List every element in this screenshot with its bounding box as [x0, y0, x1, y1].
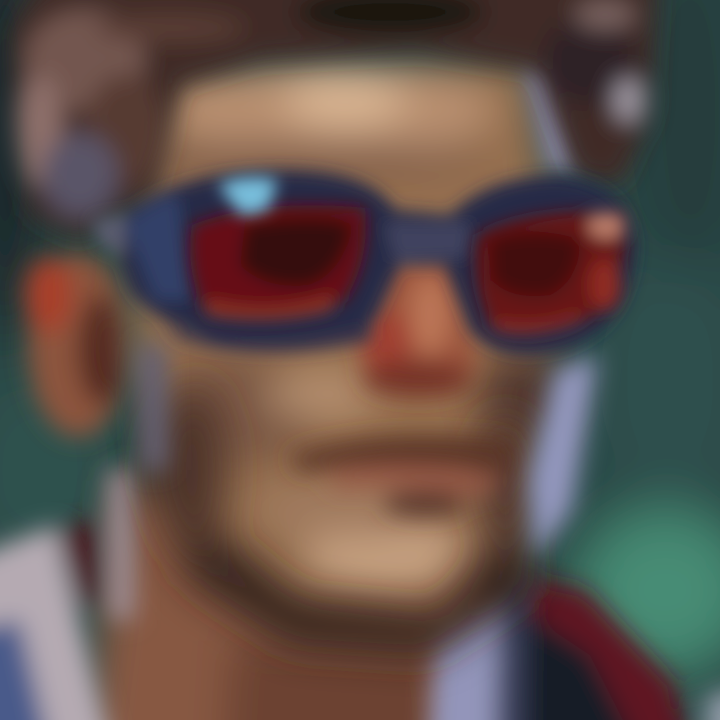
sunglasses frame [92, 170, 635, 354]
left collar [0, 470, 134, 720]
side hair strands [138, 60, 598, 560]
neck and chest [80, 480, 530, 720]
lens highlight [218, 177, 278, 216]
ear [24, 253, 128, 437]
right jacket [425, 575, 720, 720]
left lens [190, 205, 366, 319]
hair [10, 0, 660, 240]
jacket and collar [0, 470, 720, 720]
mouth and moustache [288, 435, 515, 516]
face [110, 60, 565, 610]
right lens [476, 211, 626, 334]
nose [359, 255, 478, 396]
stubble and beard [145, 385, 535, 655]
